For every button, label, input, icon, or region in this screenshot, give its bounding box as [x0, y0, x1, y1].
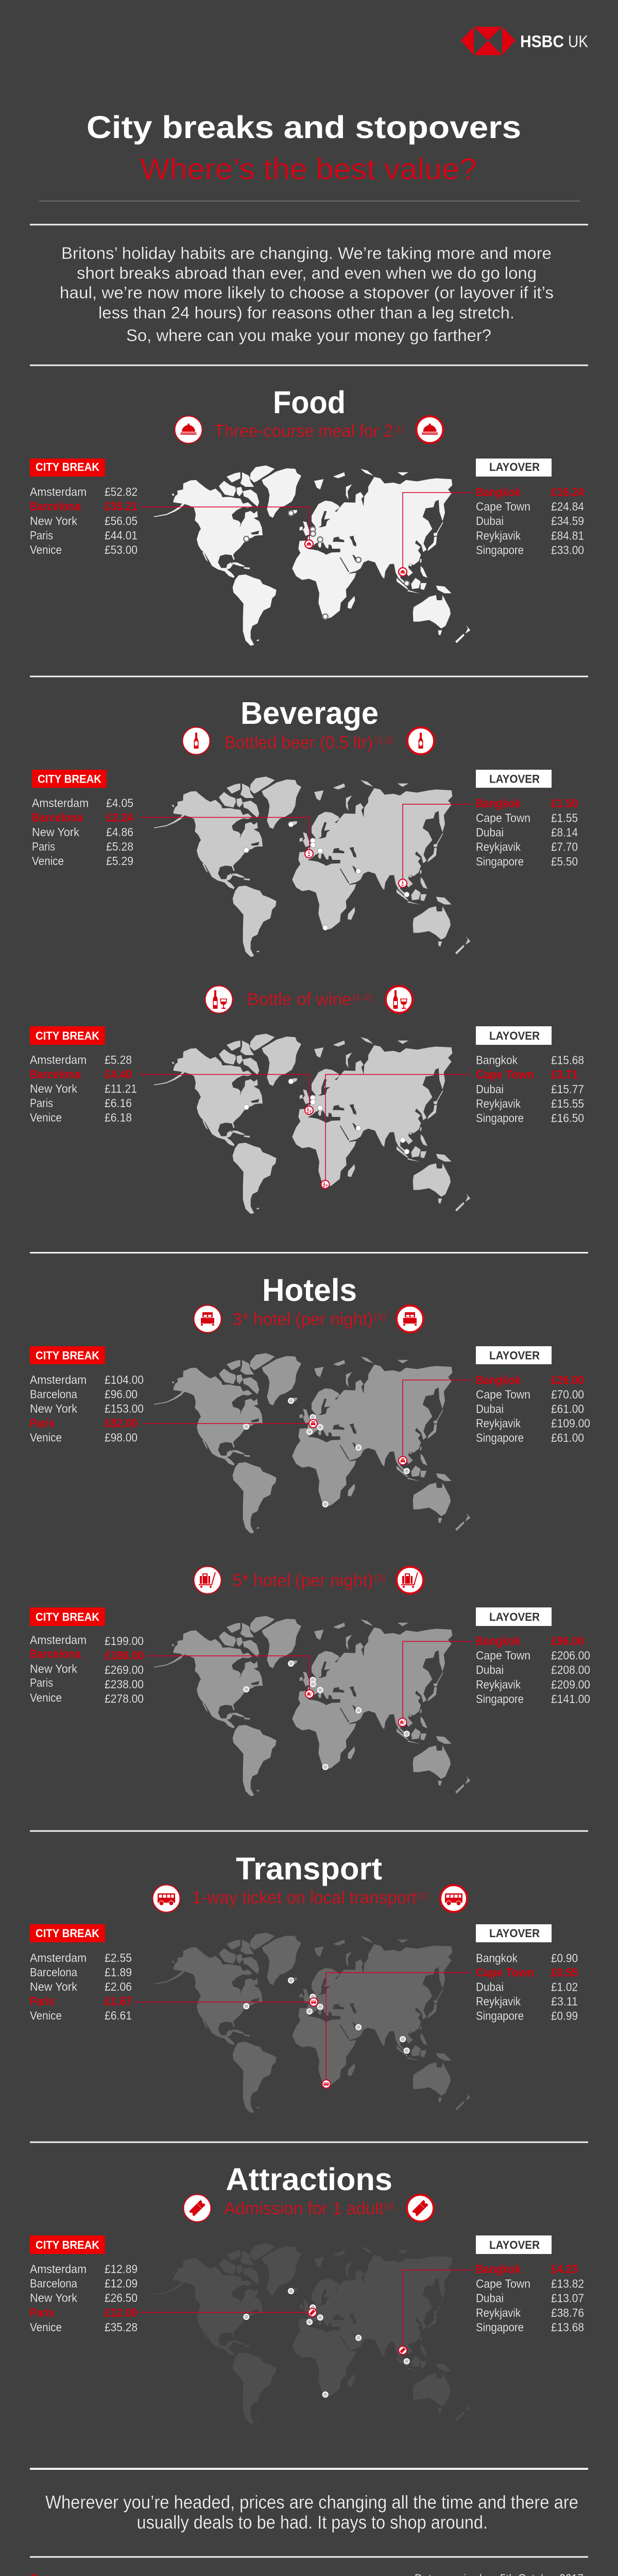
city break table: Barcelona — [30, 1965, 77, 1979]
icon: ticket left — [183, 2195, 211, 2222]
layover table: Reykjavik — [476, 1097, 521, 1110]
layover table — [476, 459, 584, 556]
label: city break: CITY BREAK — [36, 1611, 99, 1623]
layover table: £0.55 — [551, 1966, 578, 1979]
label: city break: CITY BREAK — [36, 1349, 99, 1362]
layover table: Bangkok — [476, 2262, 521, 2276]
logo: HSBC UK — [461, 27, 588, 55]
city break table: New York — [30, 2291, 77, 2304]
connector lines — [139, 804, 473, 883]
footnote marker: [3] — [374, 1313, 385, 1321]
layover table — [476, 1346, 590, 1445]
city break table: £96.00 — [105, 1387, 138, 1401]
city break table: £5.28 — [105, 1053, 132, 1066]
highlight pin: Barcelona — [305, 540, 313, 548]
city break table: £5.29 — [106, 854, 133, 868]
city break table: Amsterdam — [30, 1951, 87, 1964]
label: city break — [30, 1607, 105, 1626]
city markers — [244, 1978, 409, 2087]
intro text: less than 24 hours) for reasons other than a leg stretch. — [98, 303, 514, 322]
layover table: £61.00 — [551, 1402, 584, 1416]
highlight pin: Cape Town — [322, 2080, 331, 2088]
city break table: £52.82 — [105, 485, 138, 499]
highlight pin: Paris — [310, 1998, 318, 2006]
city break table: £12.89 — [105, 2262, 138, 2276]
layover table: £4.23 — [551, 2262, 578, 2276]
city break table: Barcelona — [30, 2277, 77, 2290]
layover table: £5.50 — [551, 855, 578, 868]
world map — [153, 1933, 470, 2113]
layover table — [476, 1924, 578, 2023]
layover table: Dubai — [476, 514, 504, 528]
layover table: £26.00 — [551, 1374, 584, 1387]
layover table: £13.07 — [551, 2292, 584, 2305]
footnote marker: [3] — [374, 1574, 385, 1583]
layover table: £33.00 — [551, 543, 584, 556]
closing statement — [45, 2492, 578, 2533]
city markers — [244, 1661, 409, 1770]
city break table: £56.05 — [105, 514, 138, 528]
highlight pin: Barcelona — [305, 850, 313, 858]
city break table: £82.00 — [105, 1416, 138, 1430]
label: layover: LAYOVER — [489, 1029, 540, 1042]
city break table: £186.00 — [105, 1649, 144, 1662]
label: layover: LAYOVER — [489, 461, 540, 473]
label: city break: CITY BREAK — [36, 2239, 99, 2251]
layover table: Cape Town — [476, 811, 530, 824]
city break table: Paris — [30, 1416, 55, 1430]
label: layover: LAYOVER — [489, 1611, 540, 1623]
connector lines — [139, 1075, 470, 1184]
layover table: £16.50 — [551, 1111, 584, 1125]
icon: ticket right — [407, 2195, 434, 2222]
city break table: Amsterdam — [30, 1373, 87, 1386]
city break table: £199.00 — [105, 1634, 144, 1648]
layover table: £209.00 — [551, 1677, 590, 1691]
layover table: Singapore — [476, 2320, 524, 2334]
city markers — [244, 511, 409, 619]
icon: wine right — [386, 986, 413, 1013]
layover table: Dubai — [476, 1663, 504, 1676]
subheading: 5 star hotel: 5* hotel (per night) — [233, 1571, 373, 1590]
world map — [153, 2243, 470, 2424]
connector lines — [147, 1641, 473, 1722]
subheading: bottled beer: Bottled beer (0.5 ltr) — [225, 733, 373, 752]
layover table: £38.76 — [551, 2306, 584, 2319]
connector lines — [143, 1380, 473, 1461]
layover table: Bangkok — [476, 1374, 521, 1387]
highlight pin: Cape Town — [321, 1180, 330, 1189]
label: layover — [476, 1026, 552, 1045]
layover table: Reykjavik — [476, 1417, 521, 1430]
city break table: New York — [30, 514, 77, 528]
city break table: Barcelona — [30, 500, 81, 513]
subheading: local transport: 1-way ticket on local transport — [192, 1888, 417, 1907]
subheading: 3 star hotel: 3* hotel (per night) — [233, 1310, 373, 1329]
highlight pin: Barcelona — [305, 1106, 313, 1114]
intro text: short breaks abroad than ever, and even when we do go long — [77, 264, 537, 282]
label: city break — [32, 770, 107, 788]
layover table: £0.99 — [551, 2009, 578, 2023]
heading: Attractions: Attractions — [226, 2162, 392, 2197]
layover table: £16.24 — [551, 485, 584, 499]
closing statement: usually deals to be had. It pays to shop around. — [137, 2512, 488, 2533]
highlight pin: Paris — [309, 1419, 317, 1428]
highlight pin: Bangkok — [399, 1718, 407, 1726]
icon: beer right — [407, 727, 434, 754]
layover table: Singapore — [476, 543, 524, 556]
city break table: £98.00 — [105, 1431, 138, 1444]
label: layover: LAYOVER — [489, 1927, 540, 1940]
city break table: £153.00 — [105, 1402, 144, 1415]
layover table: £34.59 — [551, 514, 584, 528]
layover table: £84.81 — [551, 529, 584, 542]
city break table: Amsterdam — [30, 2262, 87, 2276]
city break table: £2.55 — [105, 1951, 132, 1964]
section: Attractions — [30, 2162, 584, 2424]
layover table: £15.55 — [551, 1097, 584, 1110]
intro text: Britons’ holiday habits are changing. We’re taking more and more — [61, 244, 552, 263]
subtitle: Where’s the best value? — [140, 152, 477, 186]
city break table — [32, 770, 133, 868]
city break table: £5.28 — [106, 840, 133, 853]
label: city break: CITY BREAK — [36, 461, 99, 473]
label: layover — [476, 1924, 552, 1942]
section: Transport — [30, 1851, 578, 2113]
label: layover — [476, 1607, 552, 1626]
panel: 3 star hotel — [30, 1306, 590, 1533]
city break table: £6.61 — [105, 2009, 132, 2022]
layover table: £15.68 — [551, 1053, 584, 1066]
layover table: Bangkok — [476, 796, 521, 810]
city break table: £238.00 — [105, 1677, 144, 1691]
footnote marker: [1,2] — [375, 736, 393, 745]
highlight pin: Bangkok — [399, 2346, 407, 2354]
layover table: Reykjavik — [476, 1677, 521, 1691]
city break table: Venice — [30, 543, 62, 556]
city break table: £4.86 — [106, 825, 133, 839]
layover table: £8.14 — [551, 825, 578, 839]
layover table: £141.00 — [551, 1692, 590, 1705]
city break table: £35.21 — [105, 500, 138, 513]
label: city break — [30, 1346, 105, 1364]
icon: beer left — [182, 727, 210, 754]
layover table: Cape Town — [476, 1966, 534, 1979]
label: layover — [476, 459, 552, 477]
city break table: £2.06 — [105, 1980, 132, 1993]
city break table: Venice — [30, 1691, 62, 1704]
city break table — [30, 1607, 144, 1705]
icon: bus right — [440, 1885, 467, 1912]
intro text: haul, we’re now more likely to choose a stopover (or layover if it’s — [60, 283, 554, 302]
closing statement: Wherever you’re headed, prices are changing all the time and there are — [45, 2492, 578, 2513]
layover table: Dubai — [476, 825, 504, 839]
city break table — [30, 1026, 137, 1124]
icon: cloche left — [175, 416, 202, 443]
layover table: Reykjavik — [476, 840, 521, 853]
city break table: £26.50 — [105, 2291, 138, 2304]
world map — [153, 1353, 470, 1533]
layover table: Cape Town — [476, 1067, 534, 1081]
layover table: £109.00 — [551, 1417, 590, 1430]
connector lines — [134, 1973, 471, 2084]
layover table: Cape Town — [476, 2277, 530, 2291]
layover table: £1.50 — [551, 796, 578, 810]
label: city break: CITY BREAK — [38, 773, 101, 785]
city break table — [30, 1924, 132, 2022]
layover table: £206.00 — [551, 1649, 590, 1662]
city break table: £2.24 — [106, 811, 133, 824]
layover table: Cape Town — [476, 500, 530, 513]
city break table: Amsterdam — [30, 485, 87, 499]
layover table: £3.11 — [551, 1995, 578, 2008]
city break table: £35.28 — [105, 2320, 138, 2334]
section: Hotels — [30, 1273, 590, 1796]
city break table: Venice — [30, 1111, 62, 1124]
layover table: £70.00 — [551, 1388, 584, 1401]
layover table: Singapore — [476, 1692, 524, 1705]
icon: bus left — [152, 1885, 180, 1912]
highlight pin: Bangkok — [399, 568, 407, 576]
label: city break — [30, 2235, 105, 2254]
city break table: £11.21 — [105, 1082, 137, 1095]
layover table — [476, 770, 578, 868]
layover table — [476, 1607, 590, 1705]
city break table: Amsterdam — [32, 796, 89, 810]
layover table: Bangkok — [476, 1952, 518, 1965]
panel: 5 star hotel — [30, 1566, 590, 1796]
city break table: £1.67 — [105, 1994, 132, 2008]
city markers — [244, 2289, 409, 2397]
world map — [153, 465, 470, 646]
label: city break — [30, 1026, 105, 1045]
city break table: £6.16 — [105, 1096, 132, 1110]
icon: cloche right — [416, 416, 443, 443]
layover table: Cape Town — [476, 1388, 530, 1401]
layover table: £13.82 — [551, 2277, 584, 2291]
layover table: £1.02 — [551, 1980, 578, 1994]
label: city break: CITY BREAK — [36, 1927, 99, 1940]
city break table: Barcelona — [30, 1647, 81, 1660]
label: layover — [476, 770, 552, 788]
footnote marker: [1] — [395, 425, 404, 434]
footnote marker: [3] — [384, 2202, 394, 2211]
logo: HSBC UK: HSBC — [520, 32, 564, 50]
layover table: Bangkok — [476, 1634, 521, 1648]
panel: bottle of wine — [30, 986, 584, 1214]
label: city break — [30, 1924, 105, 1942]
highlight pin: Bangkok — [399, 1456, 407, 1465]
city break table: Amsterdam — [30, 1633, 87, 1647]
layover table: Bangkok — [476, 1053, 518, 1066]
subheading: admission: Admission for 1 adult — [224, 2199, 384, 2218]
city break table: Barcelona — [32, 811, 83, 824]
city break table — [30, 1346, 144, 1444]
city break table: Paris — [30, 1096, 53, 1110]
intro text — [60, 244, 554, 345]
section: Beverage — [30, 696, 584, 1214]
city break table: £6.18 — [105, 1111, 132, 1124]
layover table: £13.68 — [551, 2320, 584, 2334]
layover table — [476, 1026, 584, 1125]
layover table: £15.77 — [551, 1082, 584, 1096]
layover table: £0.90 — [551, 1952, 578, 1965]
layover table: £24.84 — [551, 500, 584, 513]
city break table: Amsterdam — [30, 1053, 87, 1066]
layover table: Singapore — [476, 1111, 524, 1125]
highlight pin: Barcelona — [305, 1690, 314, 1698]
connector lines — [140, 2270, 473, 2350]
city break table: New York — [30, 1980, 77, 1993]
city break table: Barcelona — [30, 1387, 77, 1401]
highlight pin: Bangkok — [399, 879, 407, 887]
label: city break — [30, 459, 105, 477]
city break table — [30, 2235, 138, 2334]
city break table: Venice — [32, 854, 64, 868]
icon: bed right — [397, 1306, 423, 1332]
icon: bed left — [194, 1306, 221, 1332]
icon: trolley left — [194, 1566, 221, 1594]
heading: Food: Food — [273, 385, 346, 420]
heading: Hotels: Hotels — [262, 1273, 357, 1308]
city break table: Venice — [30, 1431, 62, 1444]
city break table: £4.40 — [105, 1067, 132, 1081]
layover table: Reykjavik — [476, 1995, 521, 2008]
layover table — [476, 2235, 584, 2334]
city break table: £12.00 — [105, 2306, 138, 2319]
city break table: Paris — [30, 529, 53, 542]
highlight pin: Paris — [308, 2308, 316, 2316]
city break table: Venice — [30, 2009, 62, 2022]
city break table: £269.00 — [105, 1663, 144, 1676]
city break table: Paris — [30, 2306, 55, 2319]
title: City breaks and stopovers — [87, 110, 521, 145]
panel: bottled beer — [32, 727, 578, 957]
city break table: Paris — [30, 1994, 55, 2008]
label: city break: CITY BREAK — [36, 1029, 99, 1042]
layover table: £1.55 — [551, 811, 578, 824]
icon: wine left — [205, 986, 233, 1013]
layover table: Cape Town — [476, 1649, 530, 1662]
layover table: £96.00 — [551, 1634, 584, 1648]
city break table: Paris — [32, 840, 55, 853]
city break table: New York — [30, 1662, 77, 1675]
layover table: Dubai — [476, 1980, 504, 1994]
label: layover: LAYOVER — [489, 1349, 540, 1362]
layover table: Singapore — [476, 1431, 524, 1445]
layover table: Singapore — [476, 855, 524, 868]
label: layover: LAYOVER — [489, 773, 540, 785]
world map — [153, 1616, 470, 1796]
city break table: New York — [32, 825, 79, 839]
city break table: Paris — [30, 1676, 53, 1689]
city break table: New York — [30, 1082, 77, 1095]
world map — [153, 1033, 470, 1214]
city break table — [30, 459, 138, 556]
heading: Transport: Transport — [236, 1851, 382, 1886]
world map — [153, 776, 470, 957]
layover table: Dubai — [476, 1402, 504, 1416]
city break table: £278.00 — [105, 1692, 144, 1705]
city markers — [244, 1398, 409, 1507]
layover table: Reykjavik — [476, 2306, 521, 2319]
city break table: £44.01 — [105, 529, 138, 542]
city break table: £4.05 — [106, 796, 133, 810]
footnote marker: [1,2] — [353, 993, 372, 1002]
layover table: Singapore — [476, 2009, 524, 2023]
label: layover — [476, 2235, 552, 2254]
icon: trolley right — [397, 1567, 423, 1594]
layover table: Dubai — [476, 2292, 504, 2305]
heading: Beverage: Beverage — [241, 696, 379, 731]
footnote marker: [1] — [418, 1891, 427, 1900]
layover table: £61.00 — [551, 1431, 584, 1445]
city break table: £104.00 — [105, 1373, 144, 1386]
label: layover: LAYOVER — [489, 2239, 540, 2251]
city break table: £1.89 — [105, 1965, 132, 1979]
city break table: Venice — [30, 2320, 62, 2334]
subheading: three-course meal: Three-course meal for 2 — [214, 421, 393, 441]
label: layover — [476, 1346, 552, 1364]
section: Food — [30, 385, 584, 646]
city markers — [244, 822, 409, 930]
logo: HSBC UK: UK — [568, 32, 588, 50]
layover table: £3.71 — [551, 1067, 578, 1081]
layover table: £7.70 — [551, 840, 578, 853]
city markers — [244, 1079, 409, 1188]
city break table: New York — [30, 1402, 77, 1415]
city break table: Barcelona — [30, 1067, 81, 1081]
connector lines — [140, 493, 473, 572]
layover table: Dubai — [476, 1082, 504, 1096]
layover table: Reykjavik — [476, 529, 521, 542]
subheading: bottle of wine: Bottle of wine — [247, 990, 352, 1009]
city break table: £53.00 — [105, 543, 138, 556]
city break table: £12.09 — [105, 2277, 138, 2290]
intro text: So, where can you make your money go farther? — [126, 326, 491, 345]
layover table: £208.00 — [551, 1663, 590, 1676]
layover table: Bangkok — [476, 485, 521, 499]
